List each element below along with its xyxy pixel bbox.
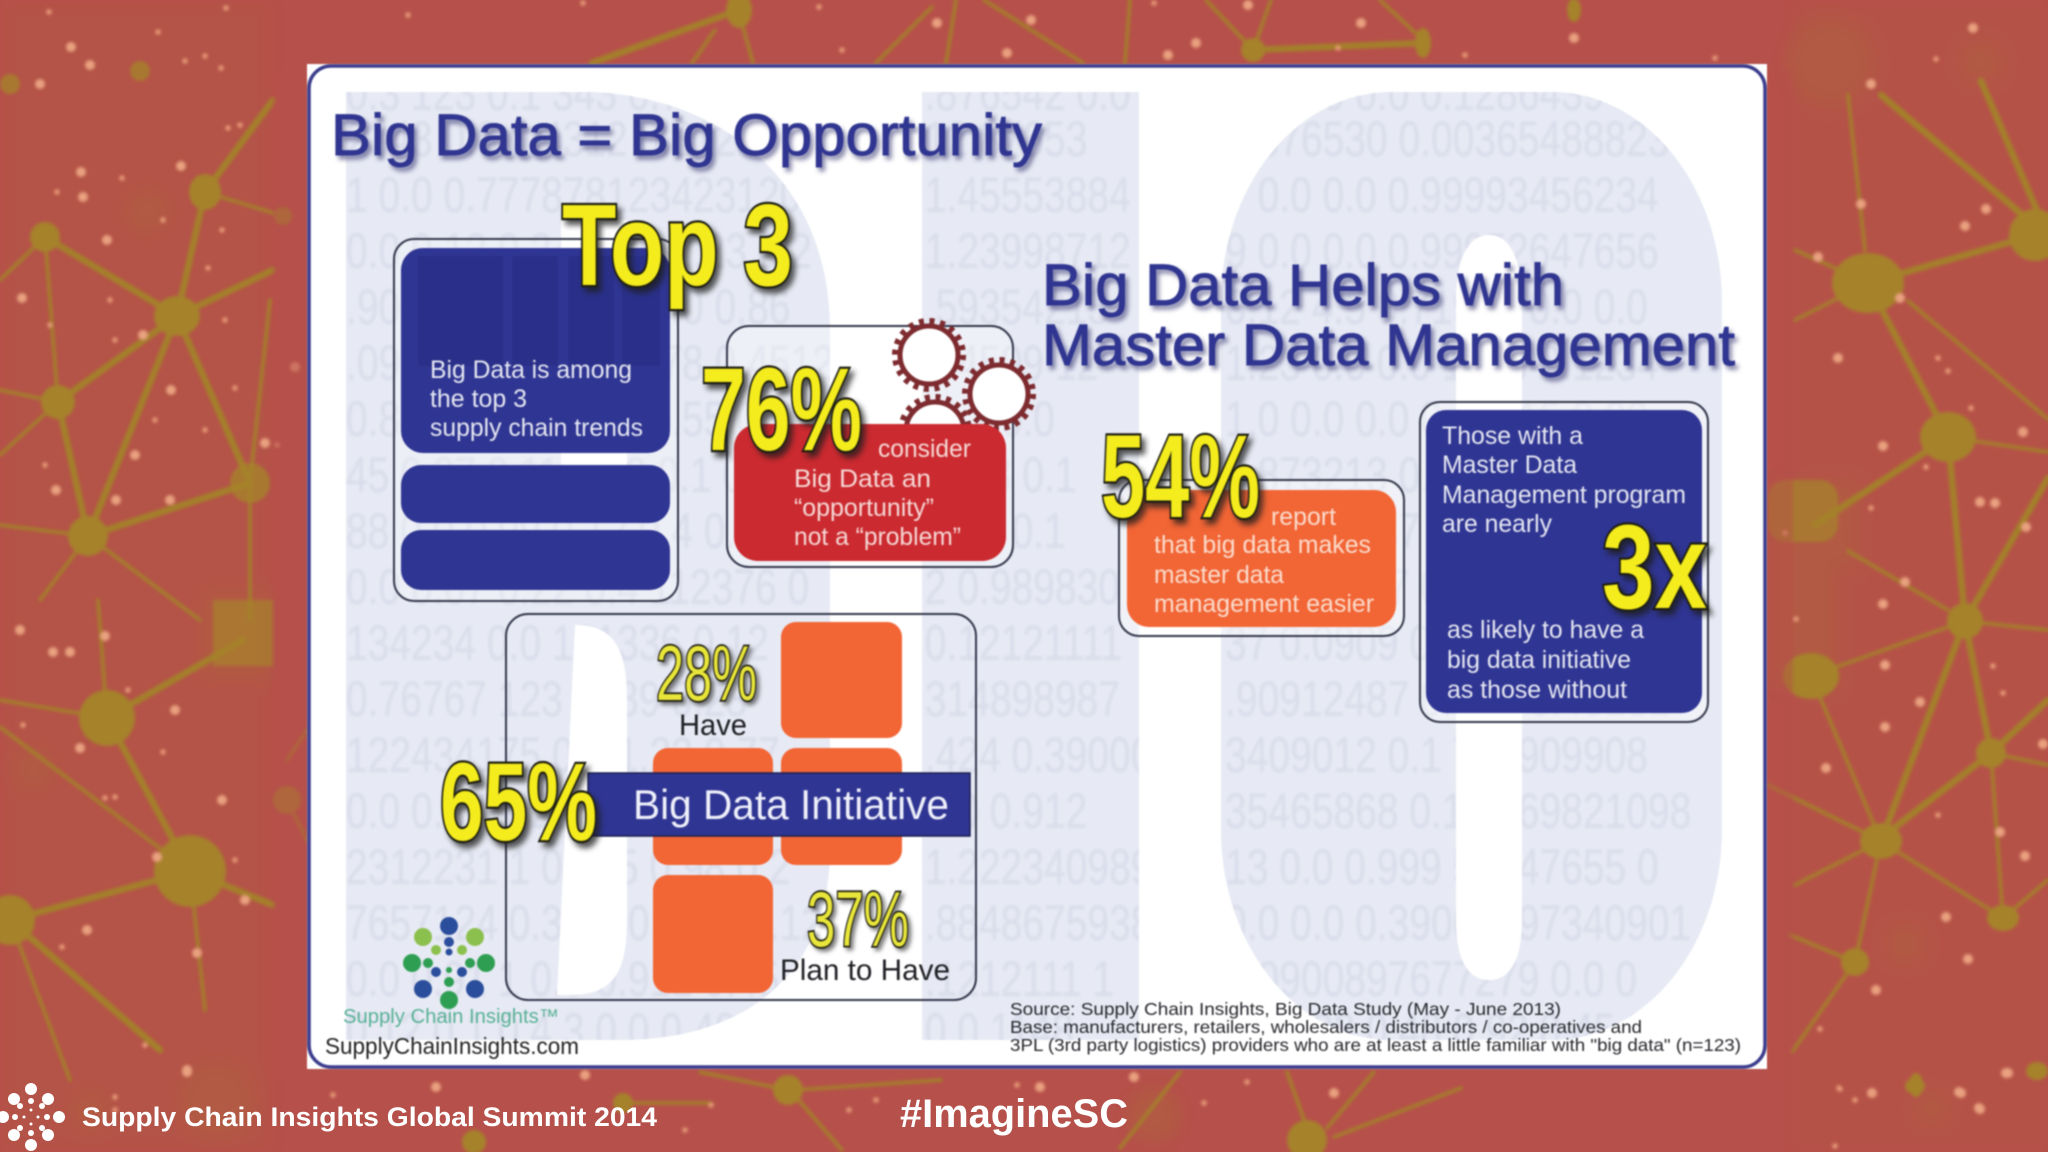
text: top 3 description: Big Data is among <box>430 356 632 384</box>
watermark: BIG letters filled with digits: 2 0.989830 <box>925 558 1120 615</box>
panel: top 3 trends <box>394 239 678 601</box>
callout: 3x: 3x <box>1602 500 1707 634</box>
watermark: BIG letters filled with digits: 0 0.8 0.1 <box>925 446 1077 503</box>
logo: Supply Chain Insights <box>343 917 559 1028</box>
watermark: BIG letters filled with digits: 0.1 0.0 0.0 0.1286439 0.12 <box>1225 64 1691 121</box>
watermark: BIG letters filled with digits: 122434175 0.0 1.23 0.77 <box>346 726 780 783</box>
text: master data easier: management easier <box>1154 590 1374 618</box>
watermark: BIG letters filled with digits: 2343 0.0 0.4312 0.812344 1 <box>346 110 834 167</box>
watermark: BIG letters filled with digits: 45 0.87 0.11 0.23 0.1 0.12 <box>346 446 798 503</box>
panel: 54% report <box>1119 480 1404 636</box>
text: top 3 description <box>430 356 643 442</box>
watermark: BIG letters filled with digits: 0.0 0.0 0.39000897340901 <box>1225 894 1691 951</box>
watermark: BIG letters filled with digits: 1 0.0 0.77787812342312012 <box>346 166 845 223</box>
watermark: BIG letters filled with digits: 3409012 0.1 748909908 <box>1225 726 1648 783</box>
panel: big data initiative <box>506 614 976 1000</box>
heading: Big Data Helps with Master Data Management <box>1042 253 1735 378</box>
text: website: SupplyChainInsights.com <box>325 1033 579 1059</box>
watermark: BIG letters filled with digits: 0.3 123 0.1 343 0.77761234 <box>346 64 834 121</box>
icon: gears <box>895 321 1033 465</box>
text: 3x description: are nearly <box>1442 510 1552 538</box>
text: source note: Base: manufacturers, retailers, wholesalers / distributors / co-operatives and <box>1010 1017 1642 1037</box>
watermark: BIG letters filled with digits: .876542 0.0 <box>925 64 1131 121</box>
callout: 76%: 76% <box>701 344 862 476</box>
watermark: BIG letters filled with digits: 37 0.0909 0.112 0.345678 <box>1225 614 1677 671</box>
watermark: BIG letters filled with digits: 1.23 0.0 0.0 1 0.0 0.1234 <box>1225 334 1659 391</box>
text: 3x description: Those with a <box>1442 422 1583 450</box>
watermark: BIG letters filled with digits: 1.0900897677279 0.0 0 <box>1225 950 1637 1007</box>
watermark: BIG letters filled with digits: 134234 0.0 121336 0.12 <box>346 614 769 671</box>
callout: 65%: 65% <box>440 741 597 864</box>
watermark: BIG letters filled with digits: 35465868 0.1 3769821098 <box>1225 782 1691 839</box>
watermark: BIG letters filled with digits: 0.0 0.9 0.7 0.123 0.9871 <box>1225 558 1648 615</box>
bar: Big Data Initiative: Big Data Initiative <box>633 781 949 828</box>
watermark: BIG letters filled with digits: 314898987 <box>925 670 1120 727</box>
heading: Big Data Helps with Master Data Management: Master Data Management <box>1042 313 1735 378</box>
watermark: BIG letters filled with digits <box>346 64 1722 1059</box>
watermark: BIG letters filled with digits: 0.8 0.22 0.31 0.4 0.55 0.2 0 <box>346 390 823 447</box>
watermark: BIG letters filled with digits: 0.873213 0.2 0.0 0.4512 <box>1225 446 1648 503</box>
text: logo wordmark: Supply Chain Insights™ <box>343 1006 559 1028</box>
watermark: BIG letters filled with digits: 0.876530 0.00365488823 <box>1225 110 1670 167</box>
stat: 28% have: 28% <box>656 629 757 717</box>
watermark: BIG letters filled with digits: 88 0.0 0.99 0.12 0.4 0.9876 <box>346 502 823 559</box>
stat: 37% plan to have: Plan to Have <box>780 954 950 987</box>
watermark: BIG letters filled with digits: .1212111 1 <box>925 950 1114 1007</box>
watermark: BIG letters filled with digits: .424 0.39000 <box>925 726 1152 783</box>
watermark: BIG letters filled with digits: .90912487 0.012 0.45231 <box>1225 670 1670 727</box>
watermark: BIG letters filled with digits: 0.0 0.91 1 0.0 0.912 0.45 <box>346 950 780 1007</box>
text: 3x description: as likely to have a <box>1447 616 1644 644</box>
text: source note: 3PL (3rd party logistics) providers who are at least a little familiar with "big data" (n=123) <box>1010 1035 1741 1055</box>
footer <box>0 1083 1128 1151</box>
watermark: BIG letters filled with digits: .8848675938 <box>925 894 1152 951</box>
text: summit name: Supply Chain Insights Global Summit 2014 <box>82 1102 657 1132</box>
watermark: BIG letters filled with digits: 13 0.0 0.999 52647655 0 <box>1225 838 1659 895</box>
text: opportunity description <box>794 435 971 551</box>
text: opportunity description: not a “problem” <box>794 523 961 551</box>
text: top 3 description: supply chain trends <box>430 414 643 442</box>
watermark: BIG letters filled with digits: 7657124 0.39000 0.98 0.12 <box>346 894 823 951</box>
text: master data easier: that big data makes <box>1154 531 1371 559</box>
watermark: BIG letters filled with digits: 2312231 1 0.445 0.98 0.2 <box>346 838 790 895</box>
text: master data easier <box>1154 503 1374 618</box>
grid of orange blocks <box>653 622 902 993</box>
stat: 37% plan to have <box>780 875 950 987</box>
heading: Big Data Helps with Master Data Management: Big Data Helps with <box>1042 253 1564 318</box>
watermark: BIG letters filled with digits: 0.76767 123 3489 0.23 <box>346 670 747 727</box>
callout: Top 3: Top 3 <box>562 180 793 310</box>
watermark: BIG letters filled with digits: .09 0.123 0.456 0.78 0.4512 <box>346 334 834 391</box>
watermark: BIG letters filled with digits: 9 0.0 0.0 0.99952647656 <box>1225 222 1659 279</box>
watermark: BIG letters filled with digits: 1.45553884 <box>925 166 1131 223</box>
watermark: BIG letters filled with digits: 1.23998712 <box>925 222 1131 279</box>
text: 3x description: as those without <box>1447 676 1627 704</box>
text: 3x description: Master Data <box>1442 451 1577 479</box>
watermark: BIG letters filled with digits: 0.0 0.87 1.23 0.56 0.223 <box>346 782 769 839</box>
watermark: BIG letters filled with digits: .34509 12 <box>925 334 1098 391</box>
watermark: BIG letters filled with digits: .2 2 0.0 <box>925 390 1055 447</box>
watermark: BIG letters filled with digits: 0.0 0.12 0.34 0.76 1.23 0.2 <box>346 222 812 279</box>
text: source note: Source: Supply Chain Insights, Big Data Study (May - June 2013) <box>1010 999 1561 1019</box>
text: source note <box>1010 999 1741 1055</box>
watermark: BIG letters filled with digits: 1.0 0.0 0.0 0.0 0.15 0.22 <box>1225 390 1648 447</box>
watermark: BIG letters filled with digits: .90 3.12 4.98 0.0 0.0 0.86 <box>346 278 790 335</box>
watermark: BIG letters filled with digits: 0.12 4.5 0.71967 0.0 0.0 <box>1225 278 1648 335</box>
watermark: BIG letters filled with digits: 1.222340989 <box>925 838 1152 895</box>
stat: 28% have: Have <box>679 709 747 742</box>
watermark: BIG letters filled with digits: 7 0.0 0.0 0.99993456234 <box>1225 166 1659 223</box>
callout: 54%: 54% <box>1101 411 1260 543</box>
bar: Big Data Initiative <box>588 773 970 836</box>
watermark: BIG letters filled with digits: .59354213 <box>925 278 1109 335</box>
text: 3x description <box>1442 422 1686 704</box>
text: opportunity description: “opportunity” <box>794 494 934 522</box>
text: 3x description: Management program <box>1442 481 1686 509</box>
watermark: BIG letters filled with digits: 0.12 0.1 0.4 3 0.0 0.48 0.9 <box>346 1002 801 1059</box>
watermark: BIG letters filled with digits: 4 0.98 0.87 0.11 0.56 0.1 <box>1225 502 1656 559</box>
title: Big Data = Big Opportunity: Big Data = Big Opportunity <box>331 103 1042 168</box>
stat: 37% plan to have: 37% <box>807 875 909 963</box>
main white panel <box>307 64 1767 1069</box>
watermark: BIG letters filled with digits: 0.0.1148 <box>925 1002 1074 1059</box>
text: opportunity description: Big Data an <box>794 465 931 493</box>
panel: 3x master data management <box>1420 402 1708 722</box>
watermark: BIG letters filled with digits: 0.0.123 0.48 0.92 0.45 0.1 <box>1225 1002 1680 1059</box>
text: master data easier: master data <box>1154 561 1284 589</box>
text: opportunity description: consider <box>878 435 971 463</box>
text: 3x description: big data initiative <box>1447 646 1631 674</box>
text: hashtag: #ImagineSC <box>900 1092 1128 1136</box>
text: top 3 description: the top 3 <box>430 385 527 413</box>
icon: summit logo <box>0 1083 65 1151</box>
panel: 76% opportunity <box>727 321 1033 567</box>
watermark: BIG letters filled with digits: 0.34 0.1 <box>925 502 1066 559</box>
stat: 28% have <box>656 629 757 742</box>
watermark: BIG letters filled with digits: 0.0 0.67 0.22 0.4 112376 0 <box>346 558 809 615</box>
watermark: BIG letters filled with digits: 12.87653 <box>925 110 1087 167</box>
text: master data easier: report <box>1271 503 1336 531</box>
watermark: BIG letters filled with digits: 0.12121111 <box>925 614 1122 671</box>
watermark: BIG letters filled with digits: 0.0 0.912 <box>925 782 1087 839</box>
